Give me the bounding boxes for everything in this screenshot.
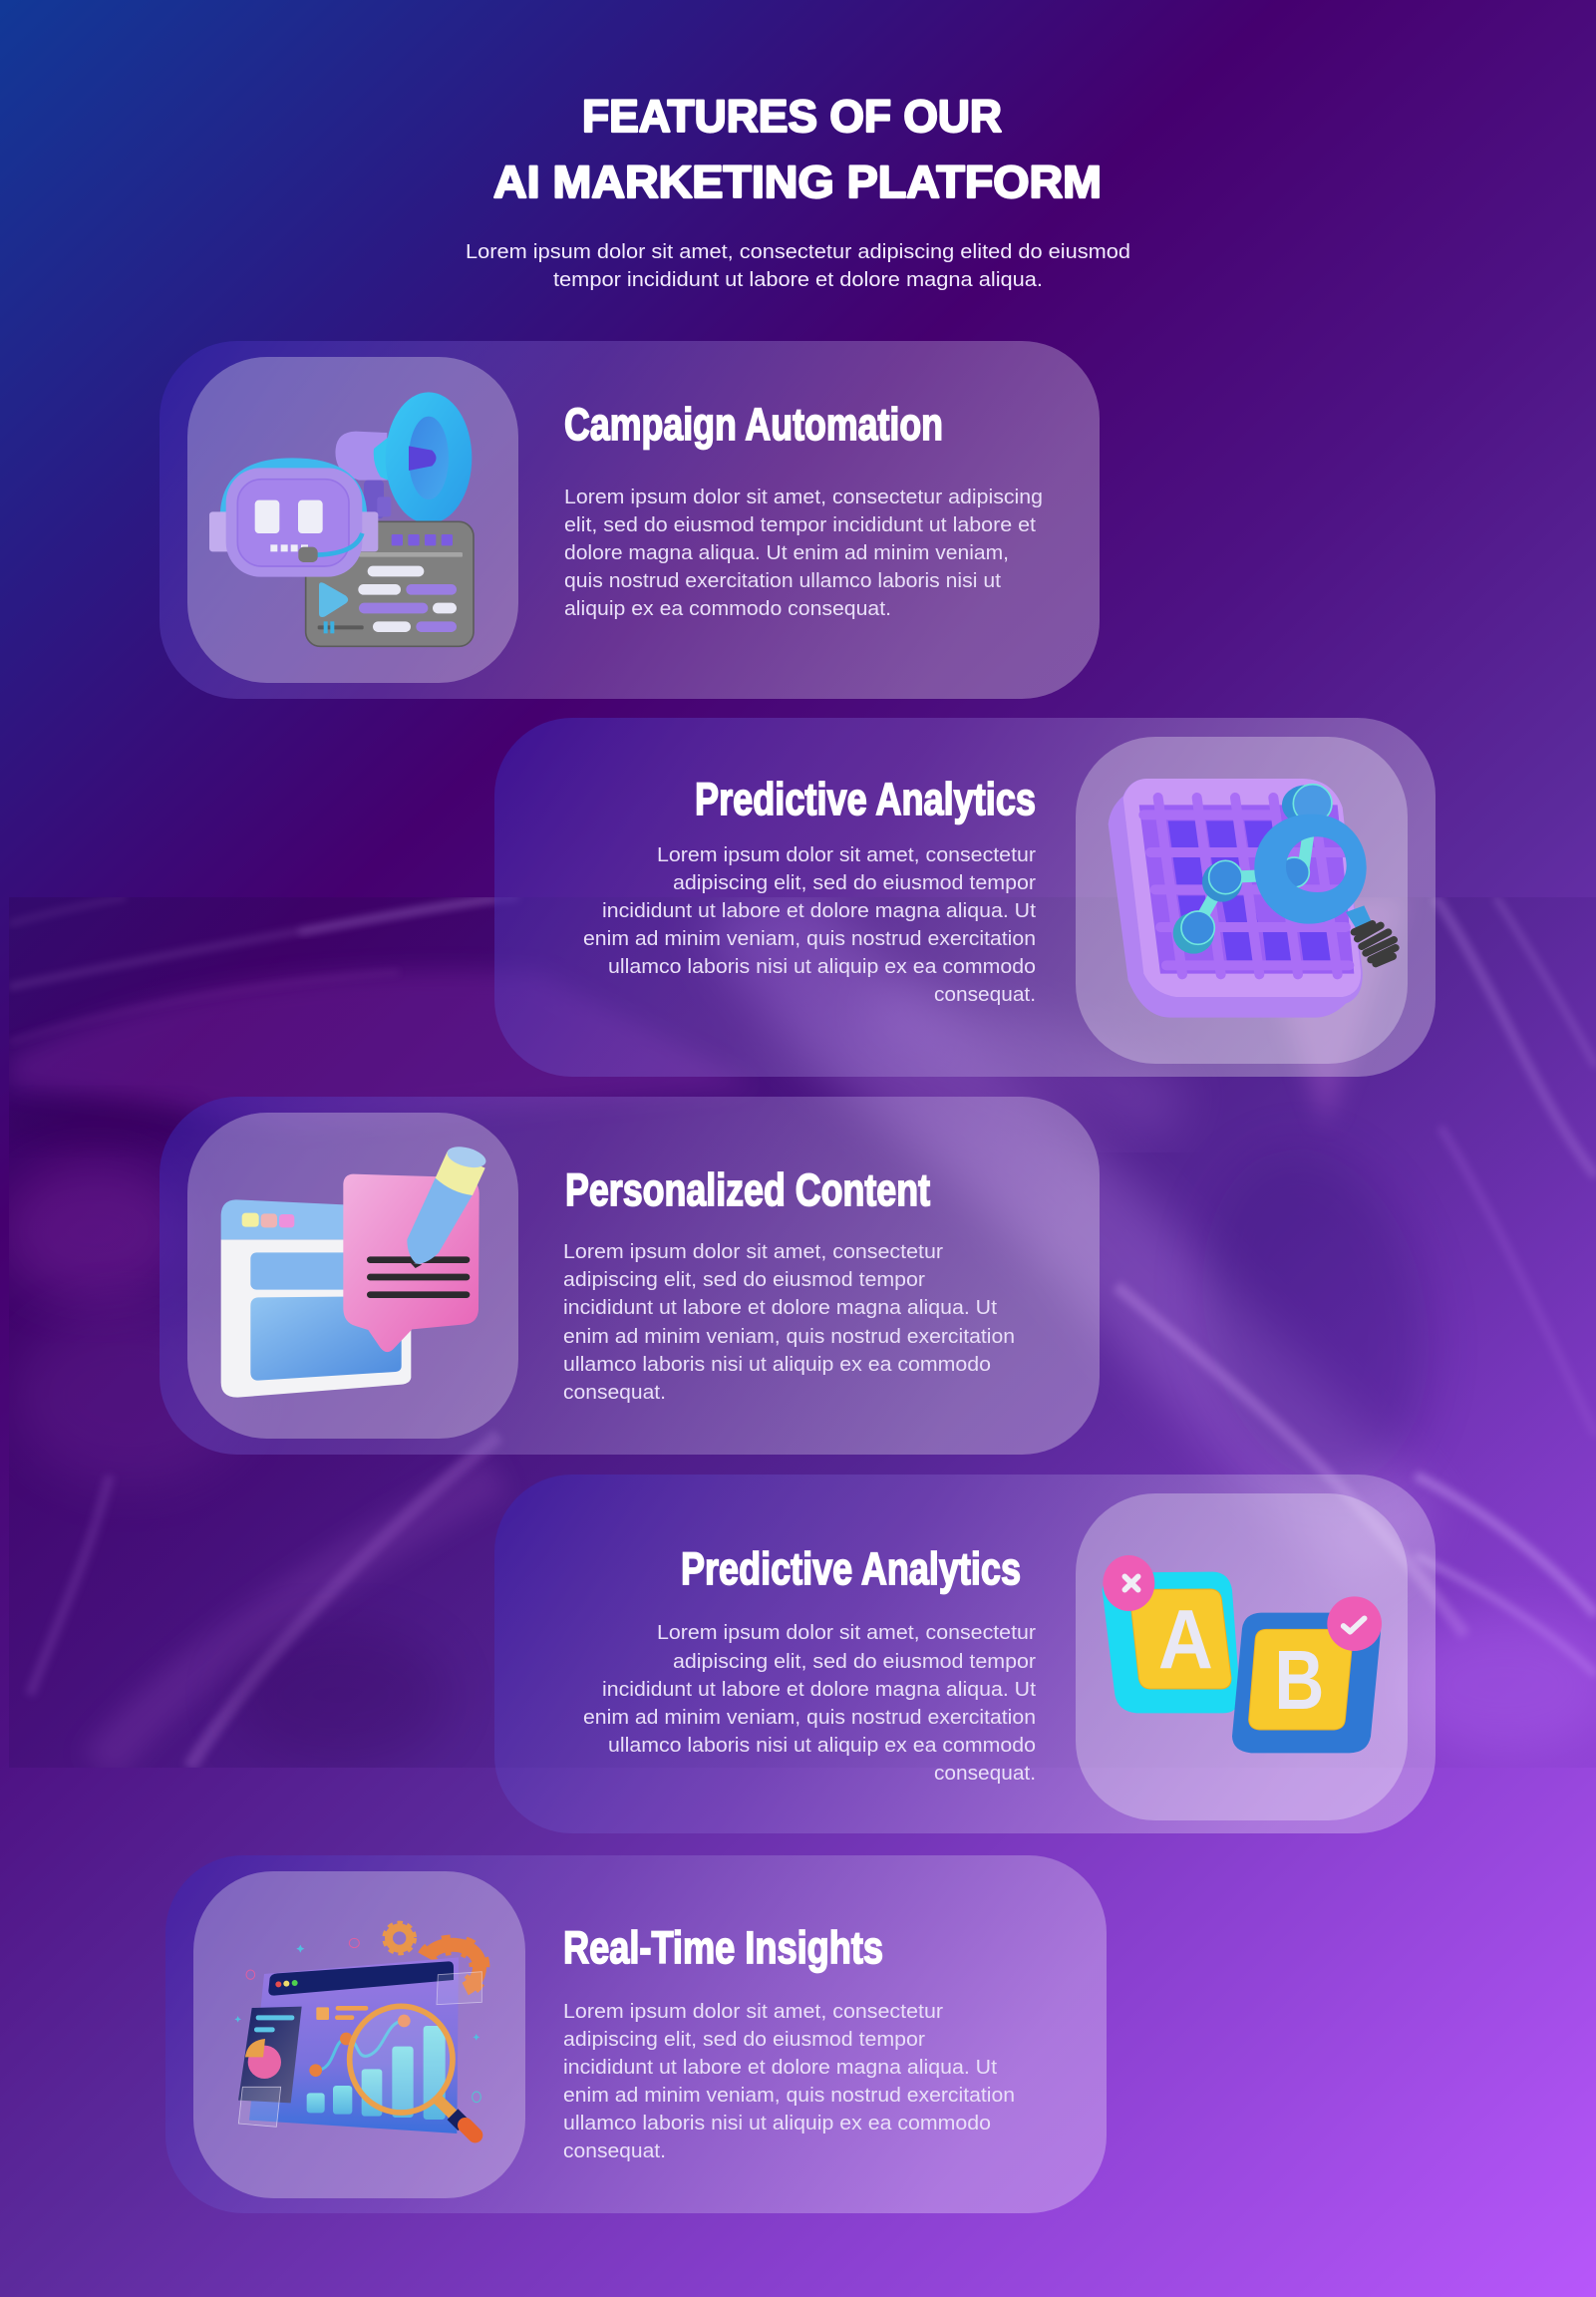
text: real-time insights description: adipiscing elit, sed do eiusmod tempor bbox=[563, 2029, 925, 2051]
icon: robot with megaphone and media panel bbox=[209, 392, 474, 646]
icon: A/B test blocks bbox=[1103, 1555, 1382, 1753]
text: predictive analytics two description bbox=[583, 1622, 1036, 1785]
heading bbox=[493, 91, 1102, 207]
panel: personalized content bbox=[160, 1097, 1100, 1455]
heading: real-time insights: Real-Time Insights bbox=[563, 1922, 883, 1973]
icon: browser window with speech bubble and pencil bbox=[221, 1143, 488, 1398]
panel: predictive analytics one bbox=[494, 718, 1436, 1077]
heading: personalized content: Personalized Content bbox=[565, 1164, 930, 1215]
text: real-time insights description: ullamco laboris nisi ut aliquip ex ea commodo bbox=[563, 2113, 991, 2134]
text: predictive analytics one description: Lorem ipsum dolor sit amet, consectetur bbox=[657, 844, 1036, 866]
text: predictive analytics one description: incididunt ut labore et dolore magna aliqua. Ut bbox=[602, 900, 1036, 922]
text: personalized content description: incididunt ut labore et dolore magna aliqua. Ut bbox=[563, 1297, 997, 1319]
text: personalized content description: ullamco laboris nisi ut aliquip ex ea commodo bbox=[563, 1354, 991, 1376]
heading: FEATURES OF OUR bbox=[582, 91, 1002, 142]
text: predictive analytics two description: enim ad minim veniam, quis nostrud exercitation bbox=[583, 1707, 1036, 1729]
subheading text: tempor incididunt ut labore et dolore magna aliqua. bbox=[553, 269, 1043, 291]
icon: A/B test blocks: A bbox=[1158, 1591, 1213, 1686]
heading: campaign automation: Campaign Automation bbox=[564, 399, 943, 450]
text: predictive analytics two description: Lorem ipsum dolor sit amet, consectetur bbox=[657, 1622, 1036, 1644]
text: campaign automation description: dolore magna aliqua. Ut enim ad minim veniam, bbox=[564, 542, 1009, 564]
text: campaign automation description: elit, sed do eiusmod tempor incididunt ut labore et bbox=[564, 514, 1036, 536]
heading: AI MARKETING PLATFORM bbox=[493, 157, 1102, 207]
text: predictive analytics one description: ullamco laboris nisi ut aliquip ex ea commodo bbox=[608, 956, 1036, 978]
text: campaign automation description: quis nostrud exercitation ullamco laboris nisi ut bbox=[564, 570, 1001, 592]
text: predictive analytics two description: consequat. bbox=[934, 1763, 1036, 1785]
text: predictive analytics two description: adipiscing elit, sed do eiusmod tempor bbox=[673, 1651, 1036, 1673]
icon: chart grid with magnifier bbox=[1109, 779, 1396, 1018]
text: campaign automation description: aliquip ex ea commodo consequat. bbox=[564, 598, 891, 620]
text: campaign automation description: Lorem ipsum dolor sit amet, consectetur adipiscing bbox=[564, 487, 1043, 508]
icon: A/B test blocks: B bbox=[1274, 1633, 1324, 1727]
panel: predictive analytics two bbox=[494, 1475, 1436, 1833]
subheading text bbox=[466, 241, 1130, 291]
text: personalized content description: Lorem ipsum dolor sit amet, consectetur bbox=[563, 1241, 943, 1263]
silk wave background band bbox=[0, 897, 1596, 1768]
text: real-time insights description: consequat. bbox=[563, 2140, 666, 2162]
heading: predictive analytics one: Predictive Analytics bbox=[695, 774, 1036, 824]
text: real-time insights description bbox=[563, 2001, 1015, 2162]
text: predictive analytics two description: incididunt ut labore et dolore magna aliqua. Ut bbox=[602, 1679, 1036, 1701]
text: real-time insights description: Lorem ipsum dolor sit amet, consectetur bbox=[563, 2001, 943, 2023]
text: real-time insights description: incididunt ut labore et dolore magna aliqua. Ut bbox=[563, 2057, 997, 2079]
subheading text: Lorem ipsum dolor sit amet, consectetur adipiscing elited do eiusmod bbox=[466, 241, 1130, 263]
text: personalized content description bbox=[563, 1241, 1015, 1404]
text: personalized content description: adipiscing elit, sed do eiusmod tempor bbox=[563, 1269, 925, 1291]
panel: real-time insights bbox=[165, 1855, 1107, 2213]
text: predictive analytics one description: enim ad minim veniam, quis nostrud exercitation bbox=[583, 928, 1036, 950]
panel: campaign automation bbox=[160, 341, 1100, 699]
heading: predictive analytics two: Predictive Analytics bbox=[681, 1543, 1021, 1594]
text: campaign automation description bbox=[564, 487, 1043, 620]
text: predictive analytics one description: adipiscing elit, sed do eiusmod tempor bbox=[673, 872, 1036, 894]
icon: analytics dashboard with magnifier bbox=[234, 1923, 481, 2136]
text: predictive analytics one description: consequat. bbox=[934, 984, 1036, 1006]
text: real-time insights description: enim ad minim veniam, quis nostrud exercitation bbox=[563, 2085, 1015, 2107]
text: personalized content description: consequat. bbox=[563, 1382, 666, 1404]
text: predictive analytics one description bbox=[583, 844, 1036, 1006]
text: personalized content description: enim ad minim veniam, quis nostrud exercitation bbox=[563, 1326, 1015, 1348]
text: predictive analytics two description: ullamco laboris nisi ut aliquip ex ea commodo bbox=[608, 1735, 1036, 1757]
